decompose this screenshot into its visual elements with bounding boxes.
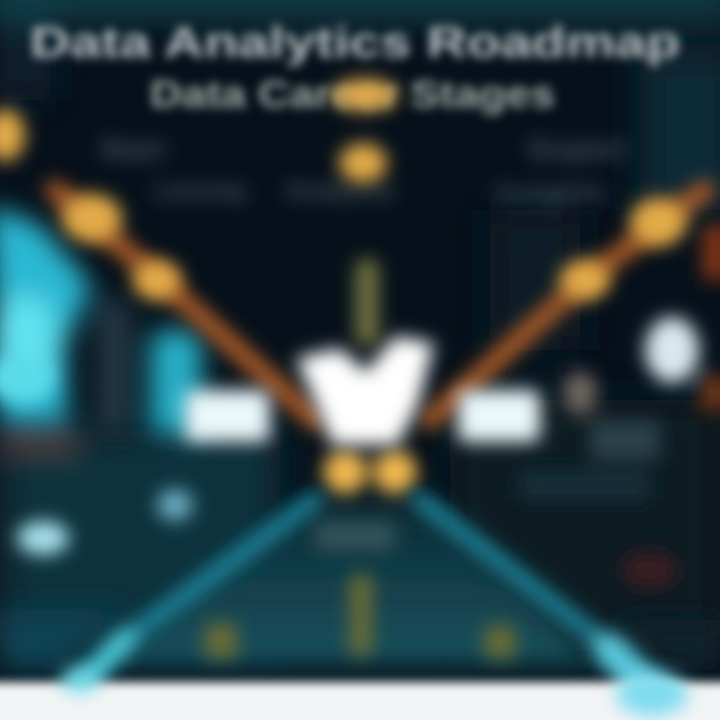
column labels: Start <box>100 134 165 164</box>
orange connector lines <box>55 190 705 420</box>
column labels <box>100 134 625 205</box>
small white spots left <box>0 354 193 555</box>
cyan road edges <box>85 500 650 690</box>
column labels: Expert <box>530 134 625 164</box>
right panel details <box>520 225 720 588</box>
title: Data Analytics Roadmap <box>30 18 680 67</box>
title: Data Career Stages <box>150 74 555 116</box>
title <box>30 18 680 116</box>
bottom cyan highlights <box>60 668 688 716</box>
floor <box>0 500 720 670</box>
column labels: Insights <box>495 180 605 205</box>
left panels: cyan <box>0 205 202 460</box>
central white chevron <box>296 336 434 445</box>
gold road markers <box>205 522 515 658</box>
gold nodes <box>0 79 686 494</box>
bottom white band <box>0 682 720 720</box>
white boxes <box>185 390 540 442</box>
column labels: Analysis <box>285 178 395 203</box>
column labels: Learning <box>155 178 245 203</box>
